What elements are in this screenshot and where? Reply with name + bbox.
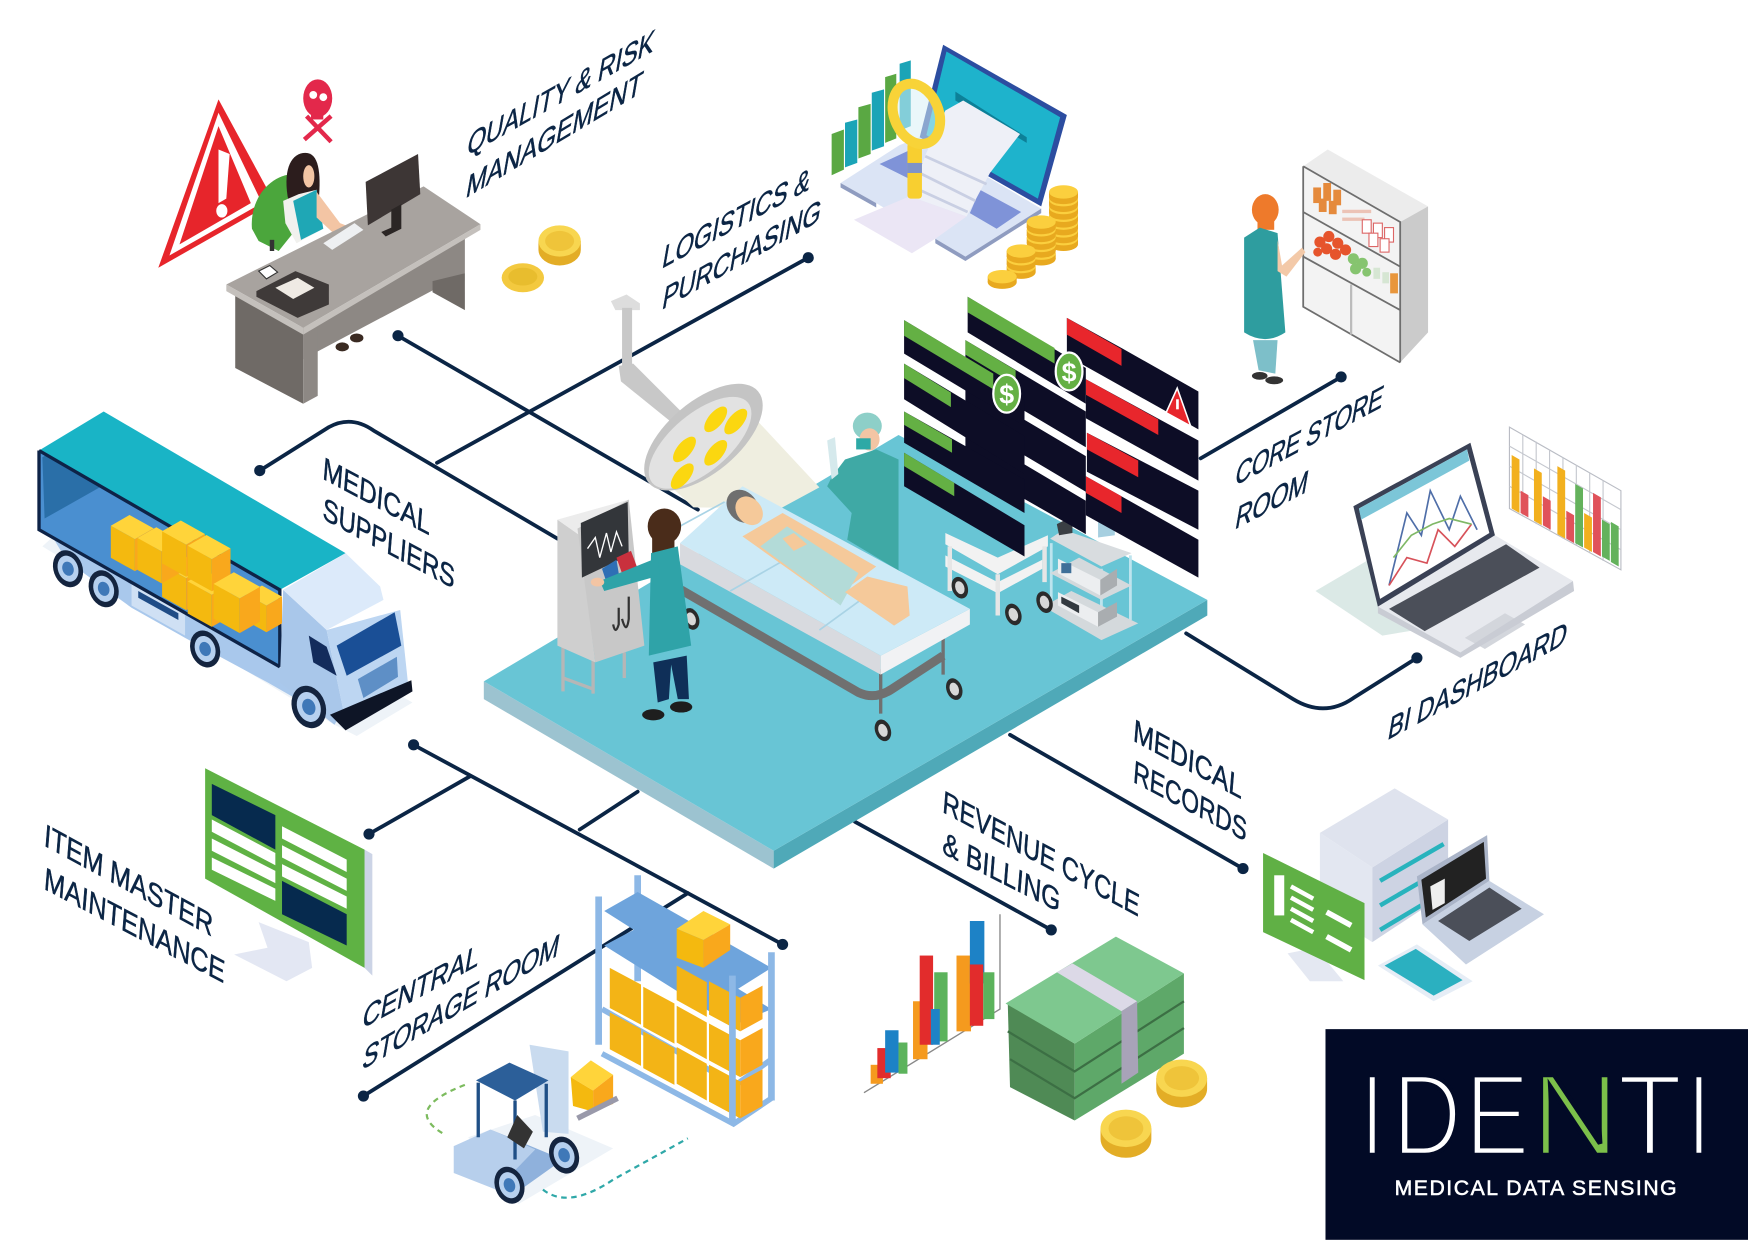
magnifier bbox=[884, 77, 949, 199]
cab bbox=[280, 553, 412, 733]
shelf boxes bbox=[610, 966, 763, 1118]
label: central storage room: CENTRAL bbox=[360, 937, 482, 1037]
woman with orange hair bbox=[1244, 194, 1305, 384]
undercarriage bbox=[50, 533, 299, 700]
keyboard bbox=[323, 223, 363, 250]
dashboard panels bbox=[904, 297, 1198, 578]
icon: dollar badge bbox=[1056, 352, 1082, 390]
icon: dollar badge bbox=[993, 375, 1020, 413]
phone bbox=[1378, 944, 1473, 1001]
truck wheels bbox=[48, 546, 225, 672]
label: medical records: MEDICAL bbox=[1132, 712, 1244, 806]
white trolley bbox=[945, 533, 1048, 628]
top box bbox=[677, 911, 730, 968]
logo wordmark: E bbox=[1465, 1050, 1530, 1180]
scene: central storage shelving bbox=[599, 875, 771, 1124]
scene: medical records devices bbox=[1263, 788, 1544, 1001]
label: revenue cycle and billing: REVENUE CYCLE bbox=[941, 784, 1141, 924]
logo wordmark: T bbox=[1618, 1050, 1682, 1180]
logo wordmark: I bbox=[1687, 1050, 1711, 1180]
label: quality and risk management: QUALITY & RISK bbox=[465, 23, 657, 164]
hospital bed bbox=[663, 486, 970, 744]
label: medical records: RECORDS bbox=[1132, 754, 1248, 849]
equipment rack bbox=[1033, 513, 1138, 640]
scene: operating room platform bbox=[484, 294, 1207, 869]
dashed route arrows bbox=[427, 1085, 465, 1134]
label: central storage room: STORAGE ROOM bbox=[360, 927, 562, 1078]
icon: dollar badge: $ bbox=[999, 380, 1014, 410]
column: red alerts bbox=[1067, 318, 1198, 578]
desk bbox=[226, 186, 480, 404]
label: logistics and purchasing: PURCHASING bbox=[660, 192, 824, 318]
monitor bbox=[1263, 853, 1365, 981]
nurse bbox=[591, 509, 692, 720]
coin stacks bbox=[988, 185, 1078, 289]
label: item master maintenance: MAINTENANCE bbox=[43, 861, 226, 990]
connector lines bbox=[254, 252, 1422, 1102]
scene: logistics laptop and invoice bbox=[832, 45, 1078, 289]
platform bbox=[484, 435, 1207, 869]
pallet box bbox=[571, 1060, 618, 1118]
container bbox=[39, 412, 346, 667]
label: item master maintenance: ITEM MASTER bbox=[43, 817, 214, 944]
ground shadow bbox=[42, 524, 412, 736]
server bbox=[1320, 788, 1448, 942]
icon: warning triangle bbox=[158, 99, 274, 268]
label: logistics and purchasing: LOGISTICS & bbox=[660, 161, 813, 277]
chart grid with bars bbox=[1509, 427, 1621, 570]
computer monitor bbox=[366, 154, 420, 237]
laptop bbox=[1417, 835, 1544, 964]
icon: warning sign bbox=[1166, 388, 1191, 426]
column: green left bbox=[904, 320, 1024, 556]
scene: core store room bbox=[1244, 150, 1428, 384]
logo tagline: MEDICAL DATA SENSING bbox=[1395, 1177, 1677, 1200]
scene: item master monitor bbox=[205, 768, 372, 981]
icon: dollar badge: $ bbox=[1062, 357, 1077, 387]
logo wordmark: D bbox=[1392, 1050, 1461, 1180]
label: core store room: ROOM bbox=[1233, 464, 1311, 538]
label: quality and risk management: MANAGEMENT bbox=[464, 64, 646, 206]
logo wordmark bbox=[1360, 1050, 1711, 1180]
column: green middle bbox=[965, 297, 1086, 534]
logo wordmark: N bbox=[1531, 1050, 1620, 1180]
surgeon bbox=[827, 413, 903, 573]
woman at desk bbox=[283, 153, 355, 243]
scene: revenue bar chart bbox=[864, 914, 1000, 1093]
laptop bbox=[841, 45, 1067, 261]
label: revenue cycle and billing: & BILLING bbox=[941, 825, 1062, 919]
label: core store room bbox=[1233, 379, 1386, 538]
laptop bbox=[1315, 443, 1574, 658]
icon: gold coins bbox=[502, 225, 581, 292]
label: medical suppliers bbox=[322, 450, 456, 596]
label: medical suppliers: MEDICAL bbox=[322, 450, 432, 542]
office chair bbox=[252, 174, 297, 251]
label: medical suppliers: SUPPLIERS bbox=[322, 491, 456, 596]
medicine cabinet bbox=[1303, 150, 1428, 362]
logo wordmark: I bbox=[1360, 1050, 1385, 1180]
invoice paper bbox=[854, 101, 1020, 253]
printer bbox=[256, 265, 329, 318]
label: core store room: CORE STORE bbox=[1233, 379, 1386, 494]
icon: cash coins bbox=[1101, 1059, 1207, 1158]
scene: cash stacks bbox=[1006, 937, 1184, 1121]
scene: delivery truck bbox=[39, 412, 412, 736]
icon: skull and crossbones bbox=[303, 79, 332, 142]
scene: quality and risk desk bbox=[158, 79, 480, 404]
patient bbox=[720, 483, 910, 626]
surgical lamp bbox=[611, 294, 819, 510]
scene: forklift bbox=[427, 1045, 688, 1208]
bar columns bbox=[832, 60, 911, 175]
label: bi dashboard: BI DASHBOARD bbox=[1385, 615, 1570, 748]
logo panel bbox=[1325, 1029, 1748, 1240]
scene: bi dashboard laptop bbox=[1315, 427, 1621, 658]
vitals console bbox=[557, 500, 644, 694]
cargo boxes bbox=[111, 515, 282, 633]
